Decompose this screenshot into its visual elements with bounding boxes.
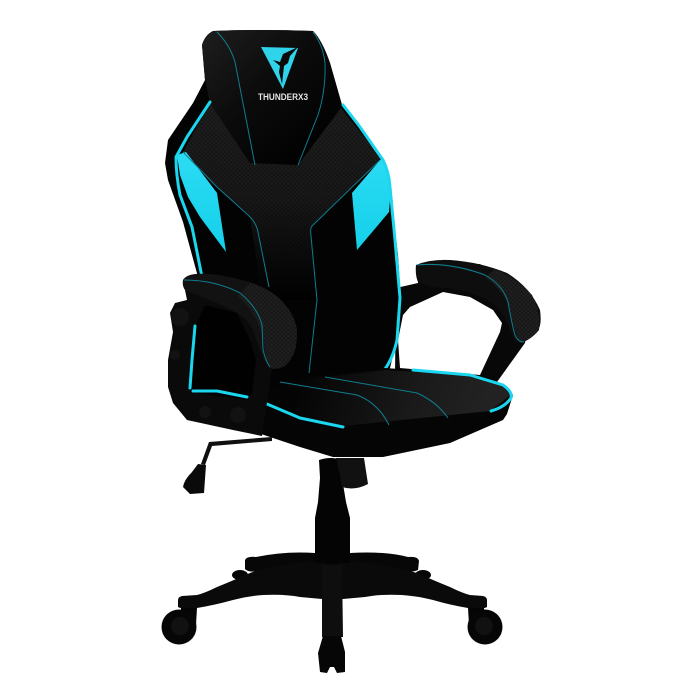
lever handle	[183, 464, 206, 494]
left arm lower cyan piping	[193, 391, 247, 397]
gas cylinder	[315, 458, 350, 563]
left arm stitching	[184, 280, 270, 367]
seat cushion surface	[267, 370, 511, 426]
backrest	[165, 30, 401, 400]
left arm frame	[168, 290, 272, 436]
height adjustment knob	[336, 458, 368, 488]
left arm pad carbon texture	[238, 283, 297, 369]
shoulder panel shading	[183, 103, 381, 300]
left cyan piping	[176, 102, 210, 277]
headrest stitching right	[298, 32, 325, 165]
right base leg	[333, 561, 487, 609]
logo wordmark: THUNDERX3	[258, 92, 308, 103]
front base leg	[322, 565, 343, 637]
left armrest	[168, 274, 297, 436]
left arm pad	[183, 274, 297, 369]
logo: thunderbolt triangle	[261, 47, 298, 89]
right arm frame	[395, 264, 530, 382]
right arm pad	[416, 260, 541, 342]
seat cyan piping right	[413, 370, 511, 411]
right arm pad carbon texture	[485, 269, 539, 343]
seat body	[258, 368, 513, 457]
left base leg	[178, 561, 332, 609]
centre stitching right	[309, 160, 380, 373]
left arm cyan piping	[190, 326, 195, 388]
tilt lever	[183, 437, 272, 494]
front caster	[318, 636, 345, 673]
headrest stitching left	[217, 32, 255, 165]
right cyan piping	[343, 105, 400, 369]
left caster	[162, 608, 197, 644]
right caster	[468, 608, 502, 644]
rear base legs	[245, 552, 419, 572]
star base	[162, 458, 502, 673]
headrest	[202, 30, 342, 165]
shoulder carbon panel	[183, 103, 381, 300]
right arm stitching	[417, 264, 524, 342]
arm frame bolts	[170, 308, 246, 423]
left cyan side panel	[177, 152, 226, 252]
backrest shell	[165, 30, 401, 400]
centre stitching left	[183, 152, 269, 287]
seat stitching front	[325, 377, 448, 418]
rear casters	[232, 570, 431, 580]
right cyan side panel	[352, 159, 391, 250]
left arm interior	[190, 305, 256, 400]
seat	[258, 368, 513, 457]
seat stitching rear	[280, 382, 389, 425]
right armrest	[395, 260, 541, 382]
seat cyan piping left	[267, 404, 343, 427]
